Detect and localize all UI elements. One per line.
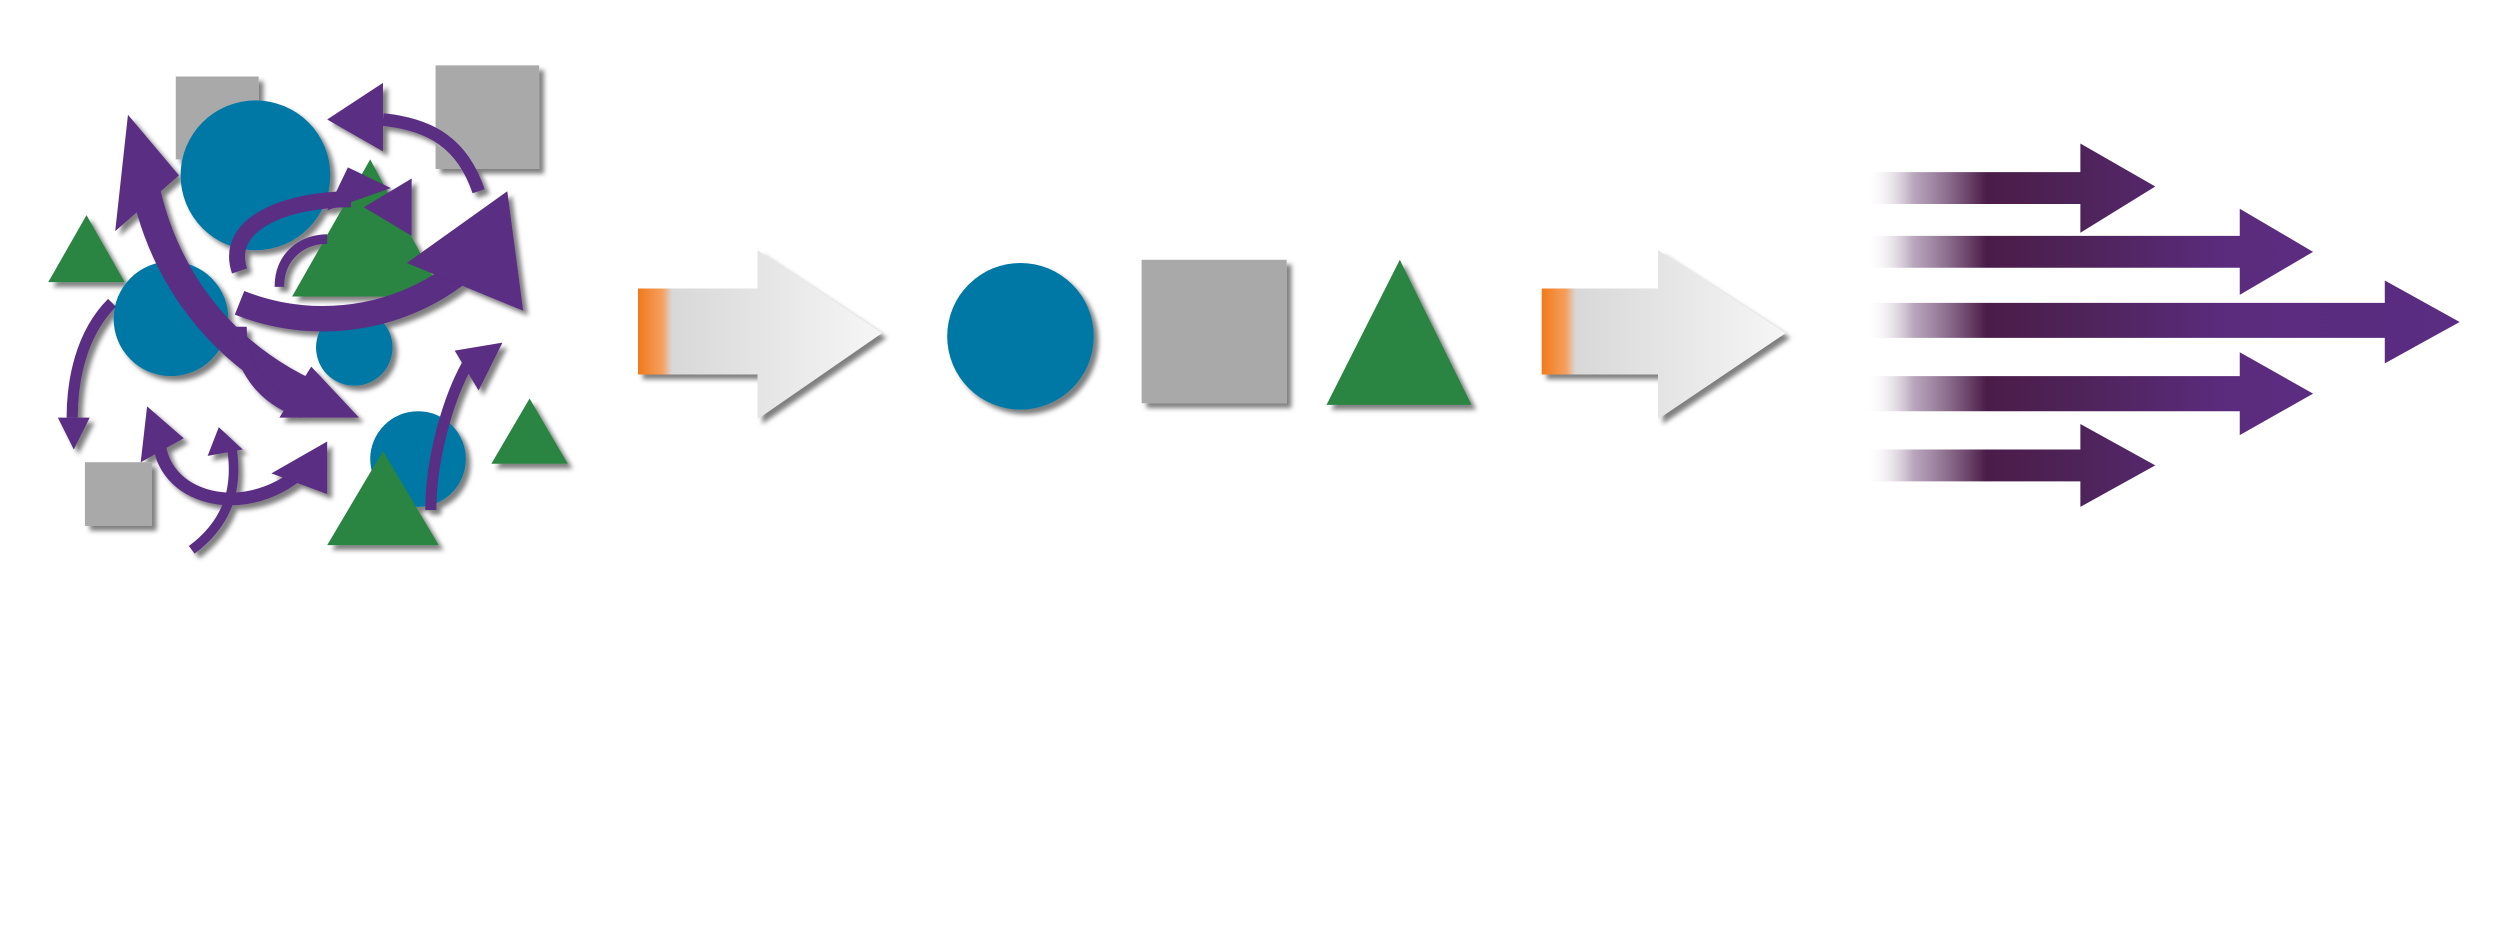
arrow 2 bbox=[1865, 209, 2313, 295]
triangle: right bbox=[491, 398, 568, 464]
circle: sorted bbox=[947, 263, 1094, 410]
arrow: first transition bbox=[638, 250, 882, 419]
sorted shapes bbox=[947, 260, 1472, 410]
triangle: sorted bbox=[1327, 260, 1472, 405]
triangle: left bbox=[48, 215, 125, 282]
circle: small center bbox=[316, 309, 393, 386]
square: top left bbox=[176, 77, 259, 159]
square: sorted bbox=[1142, 260, 1287, 403]
arrow 5 bbox=[1865, 424, 2155, 507]
chaos cluster bbox=[48, 65, 568, 550]
square: bottom left bbox=[85, 462, 152, 526]
triangle: center bbox=[292, 159, 444, 296]
arrow 3 bbox=[1865, 281, 2460, 363]
arrows: swirling purple bbox=[72, 120, 479, 550]
circle: large top bbox=[181, 100, 330, 250]
aligned arrows bbox=[1865, 143, 2460, 507]
circle: bottom right bbox=[370, 411, 466, 507]
arrow 4 bbox=[1865, 352, 2313, 435]
square: top right bbox=[436, 65, 539, 169]
triangle: bottom bbox=[327, 451, 439, 545]
circle: left bbox=[114, 261, 228, 376]
arrow: second transition bbox=[1542, 250, 1786, 419]
arrow 1 bbox=[1865, 143, 2155, 233]
